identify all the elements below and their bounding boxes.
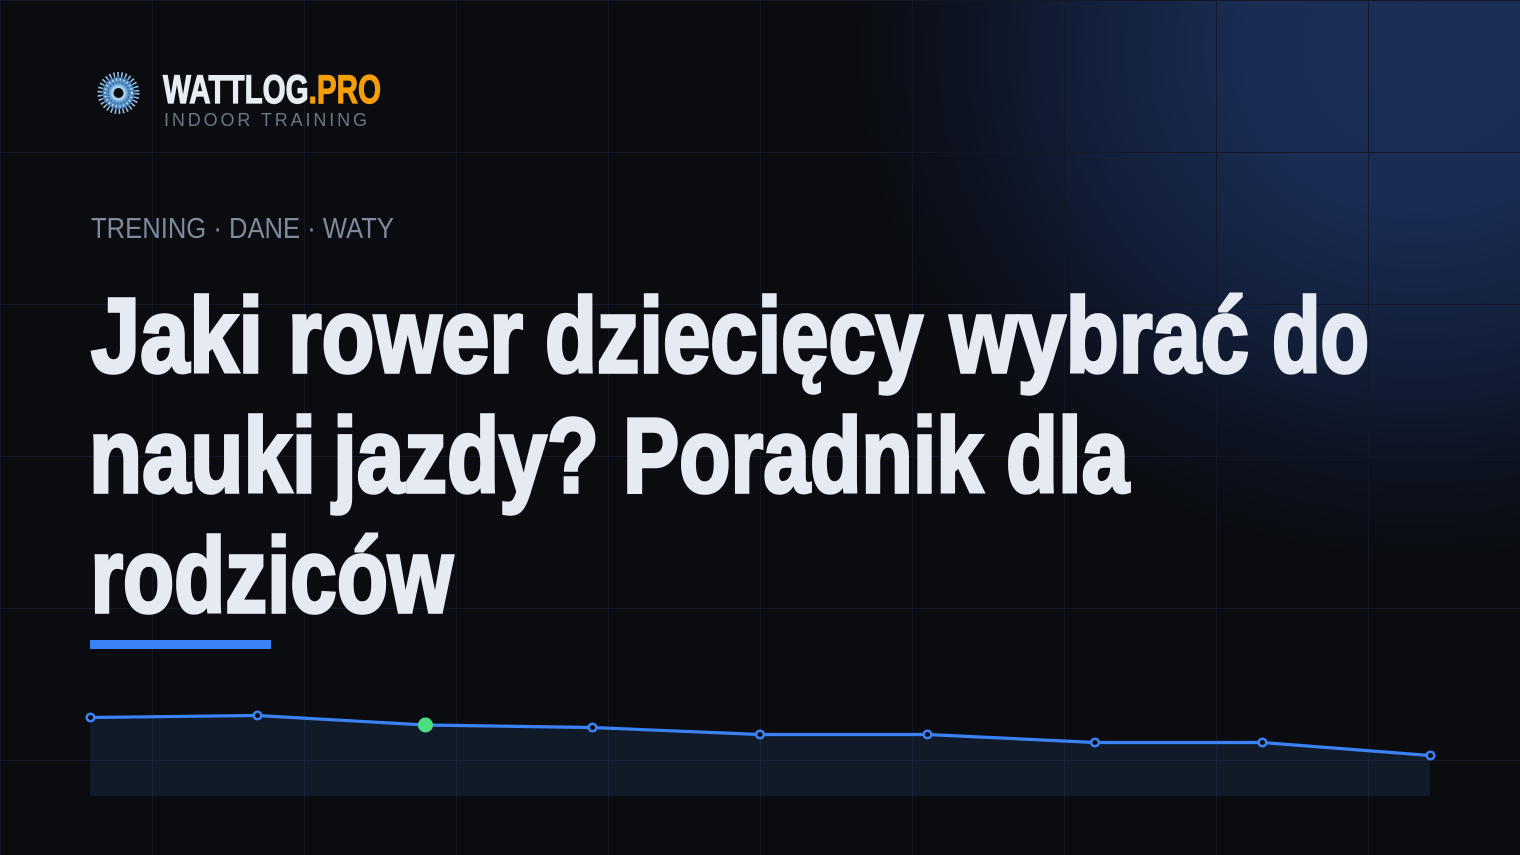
title: Poradnik bbox=[623, 397, 984, 515]
chart line bbox=[90, 716, 1430, 756]
eyebrow: TRENING · DANE · WATY bbox=[91, 213, 394, 245]
chart area fill bbox=[90, 716, 1430, 796]
title: do bbox=[1272, 277, 1369, 395]
title: jazdy? bbox=[331, 397, 599, 515]
line chart bbox=[87, 712, 1434, 796]
title: rower bbox=[288, 277, 523, 395]
title: Jaki bbox=[91, 277, 263, 395]
accent underline bbox=[90, 640, 271, 649]
chart points bbox=[87, 712, 1434, 759]
wordmark: WATTLOG.PRO bbox=[163, 68, 381, 112]
title: dla bbox=[1006, 397, 1130, 515]
title: dziecięcy bbox=[545, 277, 923, 395]
title: nauki bbox=[89, 397, 316, 515]
highlighted point bbox=[418, 718, 433, 732]
tagline: INDOOR TRAINING bbox=[164, 110, 367, 130]
icon: cassette gear bbox=[100, 74, 137, 112]
logo bbox=[100, 68, 381, 130]
title bbox=[89, 277, 1369, 635]
title: rodziców bbox=[90, 517, 453, 635]
title: wybrać bbox=[949, 277, 1249, 395]
